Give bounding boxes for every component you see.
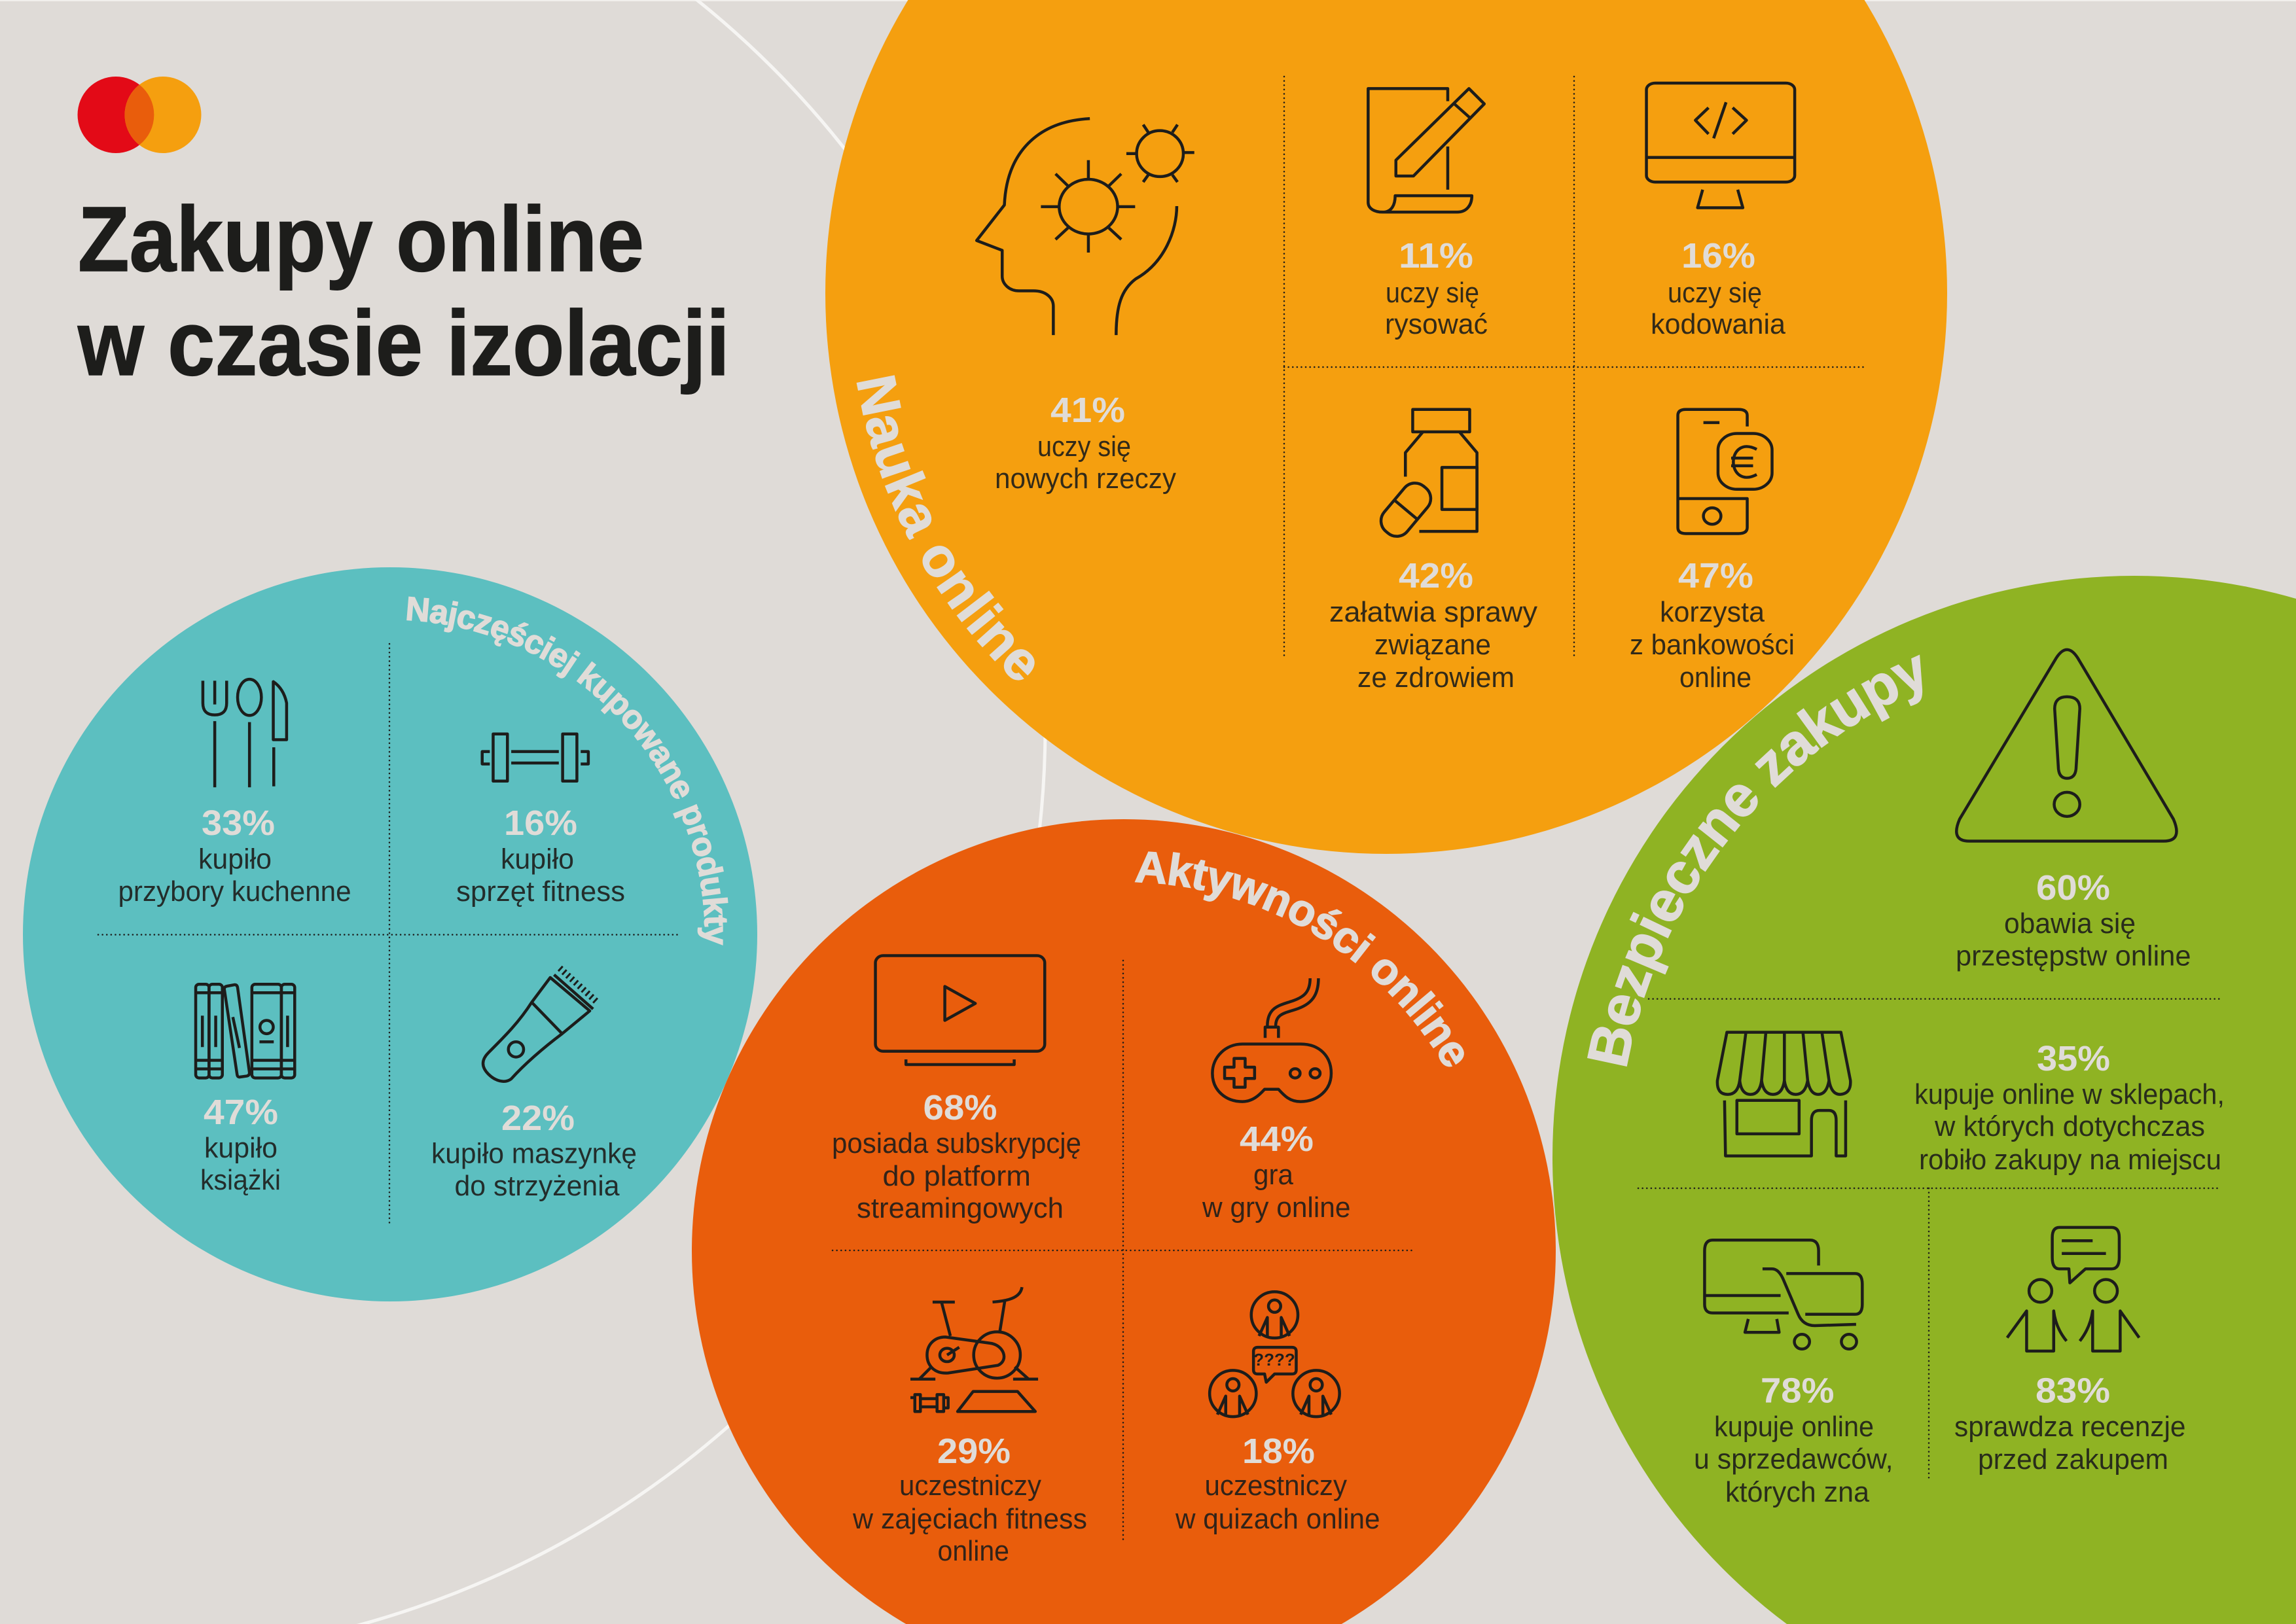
icon: storefront bbox=[1717, 1033, 1850, 1156]
stat: książki bbox=[200, 1093, 281, 1196]
stat: recenzje bbox=[1954, 1371, 2186, 1475]
stat: sprzęt fitness: kupiło bbox=[501, 843, 574, 875]
stat: zajęcia fitness: 29% bbox=[937, 1432, 1011, 1471]
stat: przestępstwa online bbox=[1956, 868, 2191, 972]
stat: maszynka do strzyżenia: kupiło maszynkę bbox=[431, 1137, 637, 1170]
icon: paper and pencil bbox=[1368, 88, 1484, 212]
heading: najczesciej kupowane produkty: Najczęściej kupowane produkty bbox=[406, 597, 728, 945]
stat: zajęcia fitness bbox=[852, 1432, 1087, 1567]
stat: przybory kuchenne: przybory kuchenne bbox=[118, 875, 351, 908]
stat: sprawy zdrowotne: 42% bbox=[1399, 556, 1473, 595]
stat: sprawy zdrowotne bbox=[1329, 556, 1537, 694]
stat: rysować: 11% bbox=[1399, 236, 1473, 275]
stat: bankowość online: online bbox=[1679, 662, 1751, 694]
stat: streaming bbox=[832, 1088, 1081, 1224]
panel: nauka online bbox=[825, 0, 1947, 854]
stat: recenzje: przed zakupem bbox=[1978, 1443, 2168, 1475]
stat: znani sprzedawcy: kupuje online bbox=[1714, 1411, 1874, 1443]
stat: streaming: 68% bbox=[923, 1088, 997, 1127]
stat: maszynka do strzyżenia: 22% bbox=[501, 1099, 575, 1138]
stat: quizy online: 18% bbox=[1242, 1432, 1315, 1471]
stat: streaming: do platform bbox=[882, 1160, 1031, 1192]
icon: exercise bike bbox=[910, 1287, 1038, 1411]
panel: aktywności online bbox=[692, 819, 1556, 1624]
icon: quiz people bbox=[1210, 1292, 1340, 1417]
stat: quizy online bbox=[1175, 1432, 1380, 1535]
icon: cutlery bbox=[203, 679, 287, 787]
stat: przestępstwa online: obawia się bbox=[2004, 908, 2136, 940]
stat: uczy się nowych rzeczy: uczy się bbox=[1037, 431, 1131, 463]
stat: przybory kuchenne: kupiło bbox=[198, 843, 272, 875]
stat: maszynka do strzyżenia: do strzyżenia bbox=[454, 1170, 620, 1202]
stat: sprawy zdrowotne: ze zdrowiem bbox=[1357, 662, 1515, 694]
stat: zajęcia fitness: online bbox=[937, 1535, 1009, 1567]
stat: bankowość online: 47% bbox=[1678, 556, 1753, 595]
icon: dumbbell bbox=[482, 734, 588, 781]
heading: bezpieczne zakupy: Bezpieczne zakupy bbox=[1587, 654, 1923, 1067]
stat: sklepy online: robiło zakupy na miejscu bbox=[1919, 1144, 2221, 1176]
icon: code monitor bbox=[1647, 83, 1795, 207]
stat: znani sprzedawcy: 78% bbox=[1761, 1371, 1834, 1411]
stat: kodowania: 16% bbox=[1681, 236, 1755, 275]
stat: bankowość online bbox=[1630, 556, 1795, 694]
icon: head with suns bbox=[977, 118, 1194, 335]
stat: przestępstwa online: 60% bbox=[2036, 868, 2110, 908]
stat: uczy się nowych rzeczy: nowych rzeczy bbox=[995, 463, 1176, 495]
stat: uczy się nowych rzeczy: 41% bbox=[1050, 391, 1125, 430]
stat: przestępstwa online: przestępstw online bbox=[1956, 940, 2191, 972]
logo bbox=[77, 77, 202, 153]
stat: quizy online: w quizach online bbox=[1175, 1503, 1380, 1535]
stat: maszynka do strzyżenia bbox=[431, 1099, 637, 1202]
stat: sprzęt fitness: 16% bbox=[504, 803, 577, 843]
icon: hair clipper bbox=[483, 968, 598, 1082]
icon: people with speech bubble bbox=[2007, 1227, 2139, 1351]
stat: sklepy online: 35% bbox=[2037, 1039, 2110, 1078]
white ring behind the panels bbox=[0, 0, 1045, 1624]
title: Zakupy online bbox=[78, 187, 644, 291]
icon: warning triangle bbox=[1956, 650, 2177, 841]
panel: bezpieczne zakupy bbox=[1552, 576, 2296, 1624]
stat: gry online: 44% bbox=[1240, 1120, 1314, 1159]
heading: aktywności online: Aktywności online bbox=[1135, 851, 1464, 1067]
stat: kodowania: kodowania bbox=[1651, 308, 1786, 340]
icon: books bbox=[196, 984, 295, 1078]
stat: recenzje: sprawdza recenzje bbox=[1954, 1411, 2186, 1443]
stat: bankowość online: z bankowości bbox=[1630, 629, 1795, 661]
heading: nauka online: Nauka online bbox=[856, 375, 1035, 680]
stat: kodowania: uczy się bbox=[1668, 277, 1762, 309]
stat: gry online: gra bbox=[1253, 1159, 1294, 1191]
icon: medicine bottle and pill bbox=[1375, 410, 1477, 542]
stat: gry online bbox=[1202, 1120, 1351, 1224]
stat: znani sprzedawcy bbox=[1694, 1371, 1893, 1508]
stat: zajęcia fitness: uczestniczy bbox=[899, 1470, 1041, 1502]
stat: sklepy online: kupuje online w sklepach, bbox=[1914, 1078, 2225, 1110]
stat: kodowania bbox=[1651, 236, 1786, 340]
stat: książki: kupiło bbox=[204, 1132, 278, 1164]
stat: przybory kuchenne: 33% bbox=[202, 803, 275, 843]
panel: najczęściej kupowane produkty bbox=[23, 567, 757, 1301]
stat: znani sprzedawcy: u sprzedawców, bbox=[1694, 1443, 1893, 1475]
stat: uczy się nowych rzeczy bbox=[995, 391, 1176, 495]
stat: książki: książki bbox=[200, 1164, 281, 1196]
icon: tv play bbox=[876, 956, 1045, 1065]
stat: sklepy online bbox=[1914, 1039, 2225, 1176]
icon: game controller bbox=[1212, 978, 1331, 1102]
icon: phone with euro bbox=[1678, 410, 1772, 533]
stat: zajęcia fitness: w zajęciach fitness bbox=[852, 1503, 1087, 1535]
stat: recenzje: 83% bbox=[2036, 1371, 2110, 1411]
icon: monitor and cart bbox=[1704, 1240, 1862, 1349]
stat: gry online: w gry online bbox=[1202, 1192, 1351, 1224]
stat: przybory kuchenne bbox=[118, 803, 351, 908]
stat: rysować bbox=[1385, 236, 1488, 340]
stat: sprawy zdrowotne: związane bbox=[1374, 629, 1491, 661]
stat: sprzęt fitness: sprzęt fitness bbox=[456, 875, 625, 908]
stat: książki: 47% bbox=[204, 1093, 278, 1132]
stat: quizy online: uczestniczy bbox=[1204, 1470, 1347, 1502]
stat: streaming: streamingowych bbox=[857, 1192, 1064, 1224]
stat: sprawy zdrowotne: załatwia sprawy bbox=[1329, 596, 1537, 628]
title: w czasie izolacji bbox=[77, 291, 730, 395]
stat: sprzęt fitness bbox=[456, 803, 625, 908]
stat: rysować: uczy się bbox=[1386, 277, 1479, 309]
stat: bankowość online: korzysta bbox=[1660, 596, 1765, 628]
stat: streaming: posiada subskrypcję bbox=[832, 1127, 1081, 1159]
stat: rysować: rysować bbox=[1385, 308, 1488, 340]
title bbox=[77, 187, 730, 395]
icon: quiz people: ???? bbox=[1253, 1350, 1295, 1369]
stat: znani sprzedawcy: których zna bbox=[1725, 1476, 1870, 1508]
stat: sklepy online: w których dotychczas bbox=[1934, 1110, 2205, 1142]
